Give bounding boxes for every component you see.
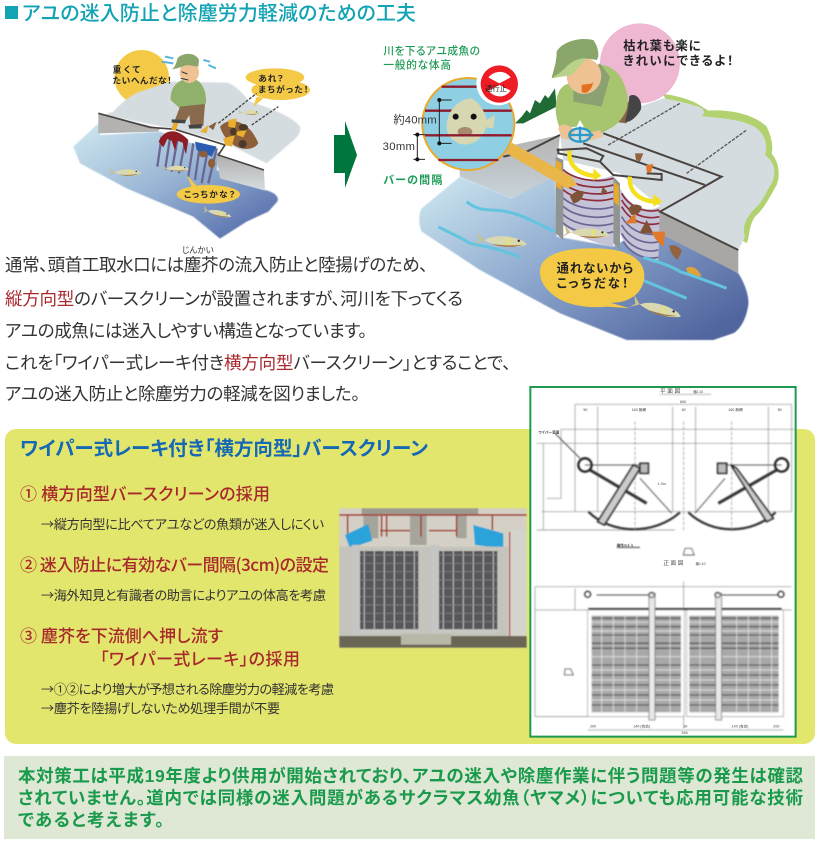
farmer <box>171 54 206 129</box>
pink bubble text <box>623 38 733 68</box>
intro text <box>5 245 511 404</box>
drawing labels: ワイパー装置 <box>538 429 560 434</box>
drawing labels: 200 <box>590 725 596 729</box>
water <box>419 177 748 340</box>
intro text: じんかい <box>182 245 214 255</box>
speech text: heavy work: たいへんだな！ <box>112 75 172 85</box>
vertical bars <box>157 137 217 183</box>
trees <box>515 88 557 123</box>
caption: body height <box>383 44 480 71</box>
dashed lines <box>608 103 747 173</box>
valve wheel <box>569 127 593 142</box>
debris pile <box>199 118 258 168</box>
drawing labels: 操作ﾊﾝﾄﾞﾙ <box>617 542 633 547</box>
drawing: plan and front elevation <box>530 387 796 737</box>
drawing labels: 160 無網 <box>632 407 646 412</box>
item 2 <box>20 551 329 604</box>
caption: body height: 川を下るアユ成魚の <box>383 44 480 57</box>
speech bubble: mistaken: まちがった！ <box>258 83 308 94</box>
speech text: heavy work: 重くて <box>113 64 140 75</box>
arrow <box>334 121 357 188</box>
drawing labels <box>538 388 782 735</box>
caption: body height: 一般的な体高 <box>383 58 451 71</box>
speech bubble: cannot pass: こっちだな！ <box>557 277 628 291</box>
leaves <box>570 153 702 277</box>
item 3: 「ワイパー式レーキ」の採用 <box>100 645 300 670</box>
water <box>73 123 278 239</box>
item 2: ② 迷入防止に有効なバー間隔(3cm)の設定 <box>20 551 329 576</box>
dashed lines <box>218 93 278 125</box>
speech bubble: mistaken: あれ？ <box>258 73 283 83</box>
magnifier: bar spacing <box>422 78 514 170</box>
speech bubble: this way: こっちかな？ <box>184 190 235 200</box>
magnifier pointer <box>507 143 577 188</box>
drawing labels: 50 <box>778 408 782 412</box>
dimensions: 約40mm <box>393 112 437 126</box>
drawing labels: 160 無網 <box>728 407 743 412</box>
speech bubble: mistaken <box>246 68 310 107</box>
panel: horizontal bar screen features <box>5 429 815 744</box>
drawing labels: 140 (有効) <box>732 724 749 729</box>
intro text: 通常、頭首工取水口には塵芥の流入防止と陸揚げのため、 <box>5 255 428 275</box>
conclusion panel <box>4 756 815 839</box>
farmer <box>552 39 641 142</box>
bank ground <box>560 98 774 250</box>
yellow flow arrows <box>569 151 657 202</box>
illustration: before, vertical bar screen <box>73 50 310 239</box>
drawing labels: 縮1:10 <box>696 561 706 566</box>
drawing labels: 50 <box>583 408 587 412</box>
item 3: ③ 塵芥を下流側へ押し流す <box>20 622 223 647</box>
frame lines <box>503 133 738 250</box>
concrete walls <box>98 113 265 191</box>
item 2: →海外知見と有識者の助言によりアユの体高を考慮 <box>41 585 326 604</box>
speech bubble: cannot pass: 通れないから <box>557 260 633 275</box>
water ripples <box>438 202 727 298</box>
speech text: heavy work <box>112 64 172 85</box>
conclusion panel: であると考えます。 <box>18 810 164 830</box>
intro text: 縦方向型のバースクリーンが設置されますが、河川を下ってくる <box>5 289 463 309</box>
fish <box>475 225 683 321</box>
item 1: →縦方向型に比べてアユなどの魚類が迷入しにくい <box>41 514 324 533</box>
item 3: →塵芥を陸揚げしないため処理手間が不要 <box>41 698 280 717</box>
drawing labels: 平 面 図 <box>660 388 680 395</box>
dimensions: 30mm <box>383 141 415 153</box>
item 1: ① 横方向型バースクリーンの採用 <box>20 480 270 505</box>
panel heading: ワイパー式レーキ付き「横方向型」バースクリーン <box>20 437 428 460</box>
drawing labels: 600 <box>680 400 686 404</box>
intro text: アユの迷入防止と除塵労力の軽減を図りました。 <box>5 384 360 404</box>
front elevation <box>535 582 792 730</box>
item 3 <box>20 622 334 717</box>
pink bubble <box>600 23 680 103</box>
drawing labels: 200 <box>773 725 779 729</box>
photo: installed bar screen <box>339 508 527 648</box>
no entry sign: 通行止 <box>485 84 507 93</box>
caption: bar spacing: バーの間隔 <box>383 173 442 186</box>
pink bubble text: 枯れ葉も楽に <box>623 38 701 53</box>
drawing labels: 590 <box>682 731 688 735</box>
illustration: after, horizontal bar screen <box>383 23 779 340</box>
item 3: →①②により増大が予想される除塵労力の軽減を考慮 <box>41 679 334 698</box>
fish <box>109 109 260 219</box>
bar screen <box>556 157 660 263</box>
rake <box>159 93 188 155</box>
pink bubble text: きれいにできるよ！ <box>623 54 733 68</box>
drawing labels: 60 <box>682 408 686 412</box>
drawing labels: 140 (有効) <box>633 724 650 729</box>
dimensions <box>383 112 437 161</box>
no entry sign <box>476 61 520 105</box>
intro text: アユの成魚には迷入しやすい構造となっています。 <box>5 321 367 341</box>
drawing labels: 縮1:10 <box>693 389 703 394</box>
downstream wall <box>659 212 738 273</box>
conclusion panel: されていません。道内では同様の迷入問題があるサクラマス幼魚（ヤマメ）についても応用可能な技術 <box>18 788 803 808</box>
upstream wall <box>458 135 560 198</box>
speech bubble: heavy work <box>114 50 169 105</box>
speech bubble: this way <box>177 175 240 204</box>
drawing labels: 正 面 図 <box>663 560 684 567</box>
drawing labels: 1.0m <box>658 482 666 486</box>
speech bubble: cannot pass <box>540 248 644 308</box>
sweat drops <box>162 57 216 68</box>
title: アユの迷入防止と除塵労力軽減のための工夫 <box>22 2 416 25</box>
grass <box>663 94 779 243</box>
conclusion panel: 本対策工は平成19年度より供用が開始されており、アユの迷入や除塵作業に伴う問題等の発生は確認 <box>18 766 804 786</box>
bank ground <box>103 82 300 163</box>
intro text: これを「ワイパー式レーキ付き横方向型バースクリーン」とすることで、 <box>5 353 511 373</box>
item 1 <box>20 480 324 533</box>
plan view <box>537 394 794 555</box>
drawing labels: 30 <box>683 725 687 729</box>
